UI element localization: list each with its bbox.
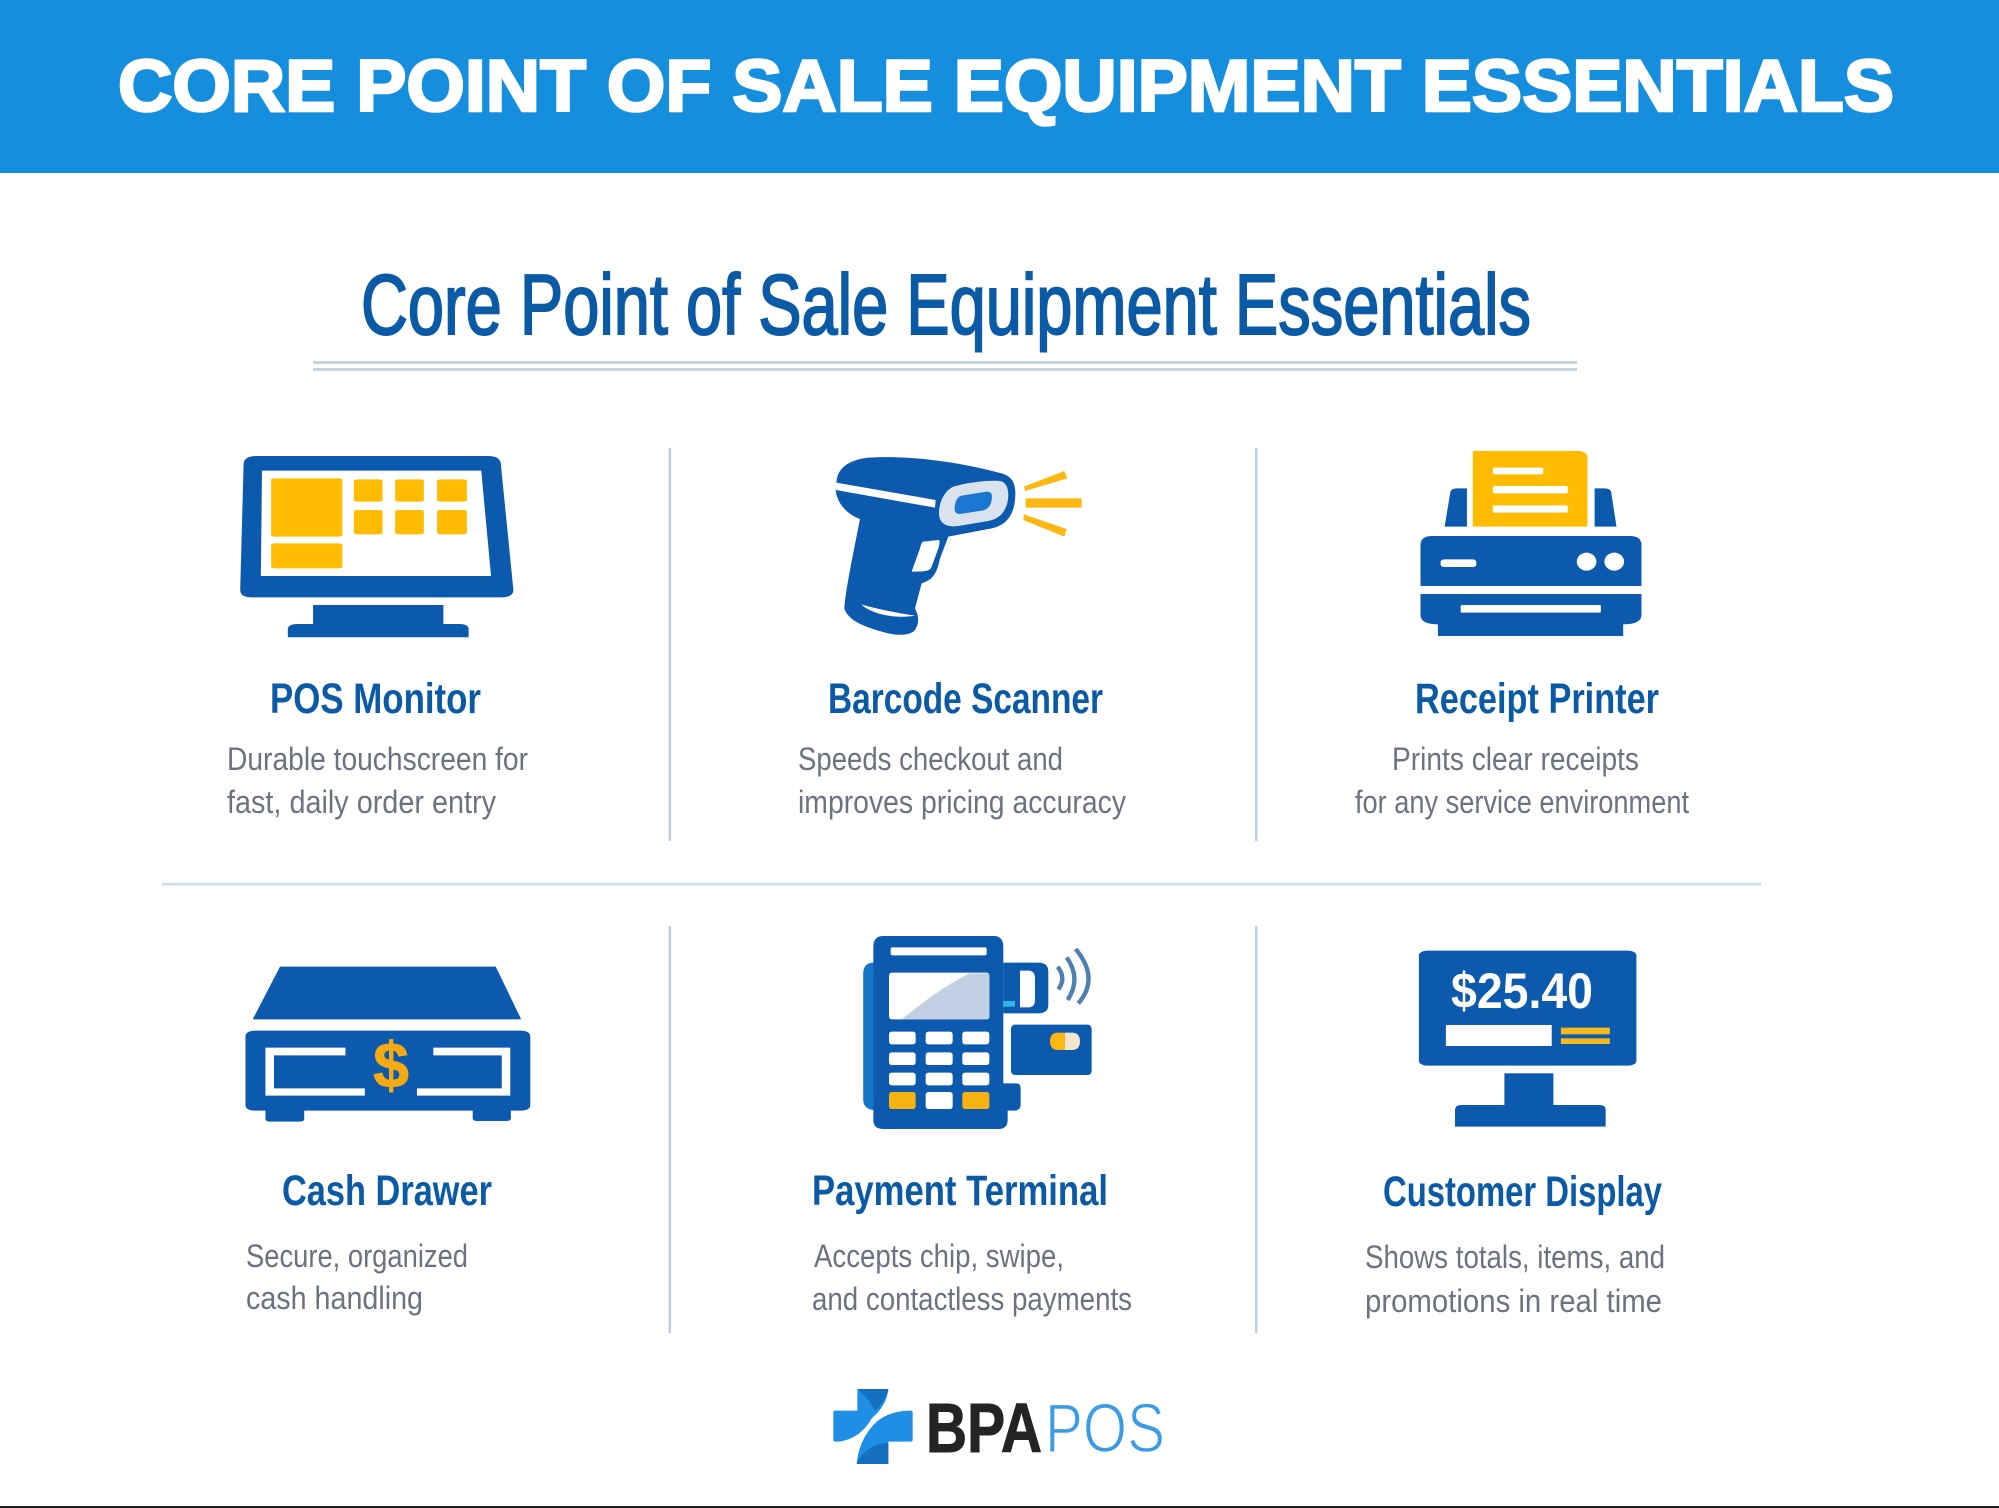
icon: POS monitor — [240, 456, 513, 637]
panel: Payment Terminal — [812, 936, 1132, 1317]
heading: POS Monitor: POS Monitor — [270, 675, 481, 723]
description: Barcode Scanner: Speeds checkout and — [798, 741, 1063, 777]
banner title: CORE POINT OF SALE EQUIPMENT ESSENTIALS — [118, 46, 1894, 127]
description: POS Monitor: fast, daily order entry — [227, 784, 496, 820]
logo: BPA POS — [833, 1389, 1165, 1467]
icon: logo cross — [833, 1389, 913, 1464]
icon: customer display: $25.40 — [1451, 963, 1593, 1019]
panel: Customer Display — [1365, 951, 1665, 1319]
heading: Barcode Scanner: Barcode Scanner — [828, 675, 1103, 723]
icon: cash drawer: $ — [373, 1029, 409, 1101]
logo wordmark POS: POS — [1045, 1389, 1165, 1467]
logo wordmark BPA: BPA — [926, 1389, 1042, 1467]
subtitle heading: Core Point of Sale Equipment Essentials — [361, 258, 1531, 353]
description: Customer Display: Shows totals, items, and — [1365, 1239, 1665, 1275]
description: Barcode Scanner: improves pricing accuracy — [798, 784, 1126, 820]
description: Payment Terminal — [812, 1238, 1132, 1317]
description: Cash Drawer: cash handling — [246, 1280, 423, 1316]
description: Payment Terminal: Accepts chip, swipe, — [814, 1238, 1064, 1274]
description: POS Monitor — [227, 741, 528, 820]
description: Customer Display — [1365, 1239, 1665, 1319]
description: Receipt Printer: for any service environment — [1355, 784, 1689, 820]
description: Receipt Printer — [1355, 741, 1689, 820]
icon: payment terminal — [863, 936, 1092, 1129]
heading: Receipt Printer: Receipt Printer — [1415, 675, 1659, 723]
panel: Cash Drawer — [245, 967, 530, 1316]
heading: Payment Terminal: Payment Terminal — [812, 1167, 1108, 1215]
panel: Barcode Scanner — [798, 457, 1126, 820]
description: Receipt Printer: Prints clear receipts — [1392, 741, 1639, 777]
panel: Receipt Printer — [1355, 451, 1689, 820]
header banner — [0, 0, 1999, 173]
icon: customer display — [1419, 951, 1636, 1127]
panel: POS Monitor — [227, 456, 528, 820]
description: Customer Display: promotions in real time — [1365, 1283, 1662, 1319]
icon: receipt printer — [1421, 451, 1641, 636]
heading: Customer Display: Customer Display — [1383, 1168, 1662, 1216]
heading: Cash Drawer: Cash Drawer — [282, 1167, 492, 1215]
icon: cash drawer — [245, 967, 530, 1122]
description: POS Monitor: Durable touchscreen for — [227, 741, 528, 777]
description: Barcode Scanner — [798, 741, 1126, 820]
description: Payment Terminal: and contactless payments — [812, 1281, 1132, 1317]
description: Cash Drawer: Secure, organized — [246, 1238, 468, 1274]
description: Cash Drawer — [246, 1238, 468, 1316]
icon: barcode scanner — [836, 457, 1082, 635]
